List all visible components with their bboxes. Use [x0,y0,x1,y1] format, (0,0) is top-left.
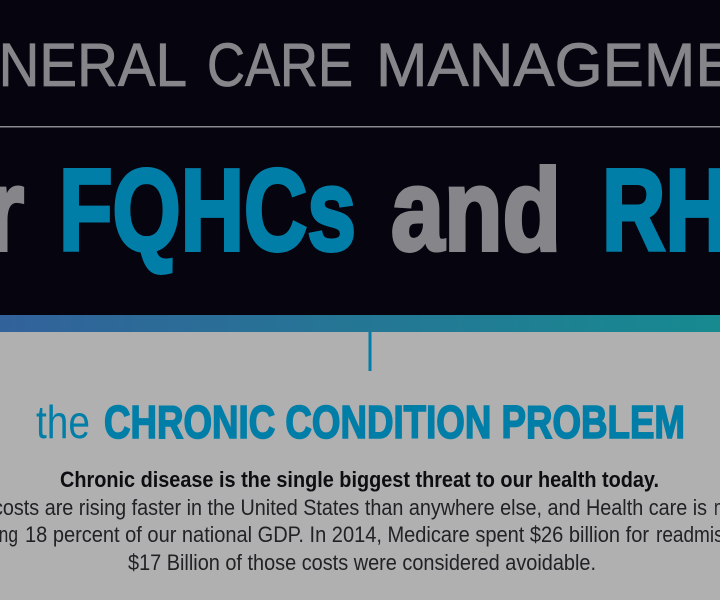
bold lead sentence: Chronic disease is the single biggest threat to our health today. [60,467,659,492]
connector line from band to section title [368,332,372,371]
intro paragraph [0,467,720,575]
body line 3: 18 percent of our national GDP. In 2014, Medicare spent $26 billion for [25,522,649,547]
heading: for FQHCs and RHCs: FQHCs [59,145,356,275]
heading: for FQHCs and RHCs [0,145,720,275]
section title: the chronic condition problem: the [36,396,90,448]
heading: general care management [0,31,720,99]
body line 4: $17 Billion of those costs were considered avoidable. [128,550,596,575]
divider rule under heading [0,126,720,128]
heading: for FQHCs and RHCs: and [391,145,561,275]
gradient band [0,315,720,332]
panel: dark header background [0,0,720,316]
heading: general care management: CARE [207,31,353,99]
panel: light body background [0,332,720,600]
